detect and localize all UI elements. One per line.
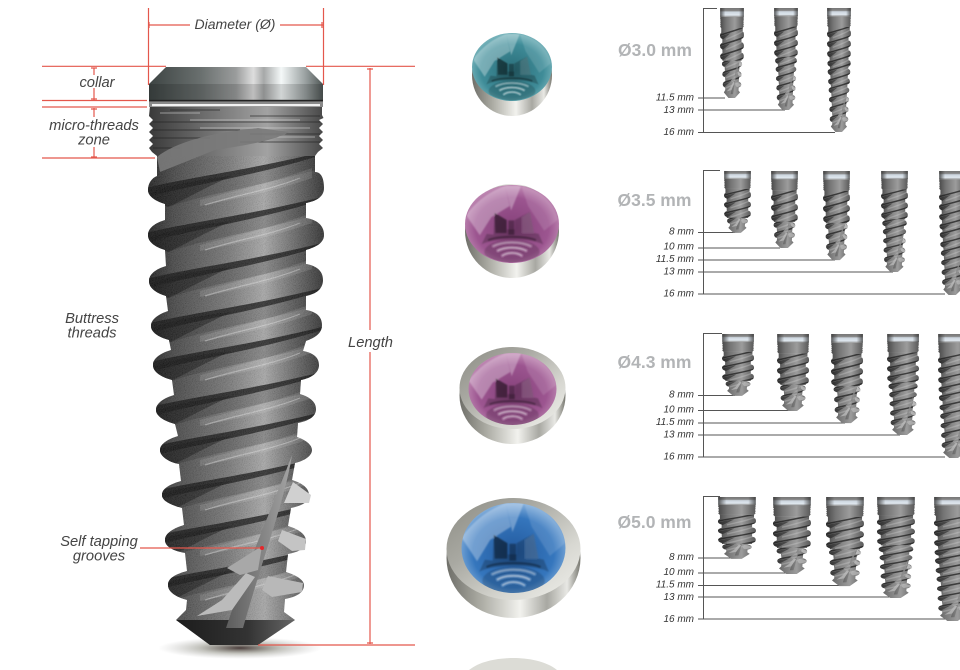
micro-threads [149, 106, 324, 172]
diameter heading: Ø5.0 mm [618, 512, 691, 532]
length labels: 8 mm [669, 390, 694, 400]
length labels: 16 mm [663, 127, 694, 138]
bracket and leader lines [698, 8, 835, 132]
diameter heading: Ø3.0 mm [618, 40, 692, 60]
implants [722, 280, 960, 463]
length labels: 11.5 mm [656, 417, 694, 428]
label: diameter: Diameter (Ø) [195, 16, 275, 32]
label: micro-threads zone: zone [77, 132, 110, 148]
bracket and leader lines [698, 170, 945, 294]
label: self tapping grooves: grooves [73, 548, 126, 564]
label: buttress threads: threads [68, 326, 117, 342]
connection head: 3.0 mm teal [472, 33, 552, 116]
length labels: 13 mm [663, 430, 694, 440]
size row: 3.5 mm [618, 117, 960, 300]
label: micro-threads zone: micro-threads [49, 118, 139, 134]
ground shadow [158, 637, 322, 659]
connection head: 5.0 mm blue [446, 498, 580, 618]
annotation labels [49, 16, 393, 564]
length labels: 16 mm [663, 614, 694, 625]
implants [720, 0, 851, 139]
connection head: 4.3 mm magenta [460, 347, 566, 444]
label: self tapping grooves: Self tapping [60, 534, 138, 550]
length labels [656, 92, 694, 138]
length labels: 10 mm [663, 242, 694, 252]
length labels: 10 mm [663, 567, 694, 578]
collar [149, 67, 323, 107]
length labels: 10 mm [663, 404, 694, 416]
length labels: 13 mm [663, 592, 694, 603]
diameter heading: Ø4.3 mm [618, 352, 691, 372]
main implant illustration [140, 67, 330, 659]
diameter heading: Ø3.5 mm [618, 190, 691, 210]
length labels: 11.5 mm [656, 580, 694, 590]
length labels: 8 mm [669, 226, 694, 238]
length labels: 13 mm [663, 105, 694, 116]
label: length: Length [348, 335, 393, 351]
length labels [656, 390, 694, 462]
connection head: partial next size [469, 658, 557, 670]
length labels: 8 mm [669, 552, 694, 563]
bracket and leader lines [698, 496, 945, 619]
length labels [656, 552, 694, 625]
implants [724, 117, 960, 300]
label: buttress threads: Buttress [65, 311, 119, 327]
size row: 3.0 mm [618, 0, 851, 139]
implants [718, 443, 960, 626]
bracket and leader lines [698, 334, 945, 457]
length labels: 11.5 mm [656, 92, 694, 104]
length labels: 11.5 mm [656, 254, 694, 265]
length labels: 13 mm [663, 266, 694, 278]
label: collar: collar [79, 75, 116, 91]
self tapping groove [197, 455, 311, 628]
length labels [656, 226, 694, 300]
length labels: 16 mm [663, 452, 694, 462]
size row: 4.3 mm [618, 280, 960, 463]
length labels: 16 mm [663, 288, 694, 300]
size row: 5.0 mm [618, 443, 960, 626]
connection head: 3.5 mm magenta [465, 184, 559, 278]
threaded body [140, 150, 330, 650]
red dimension lines [42, 8, 415, 645]
